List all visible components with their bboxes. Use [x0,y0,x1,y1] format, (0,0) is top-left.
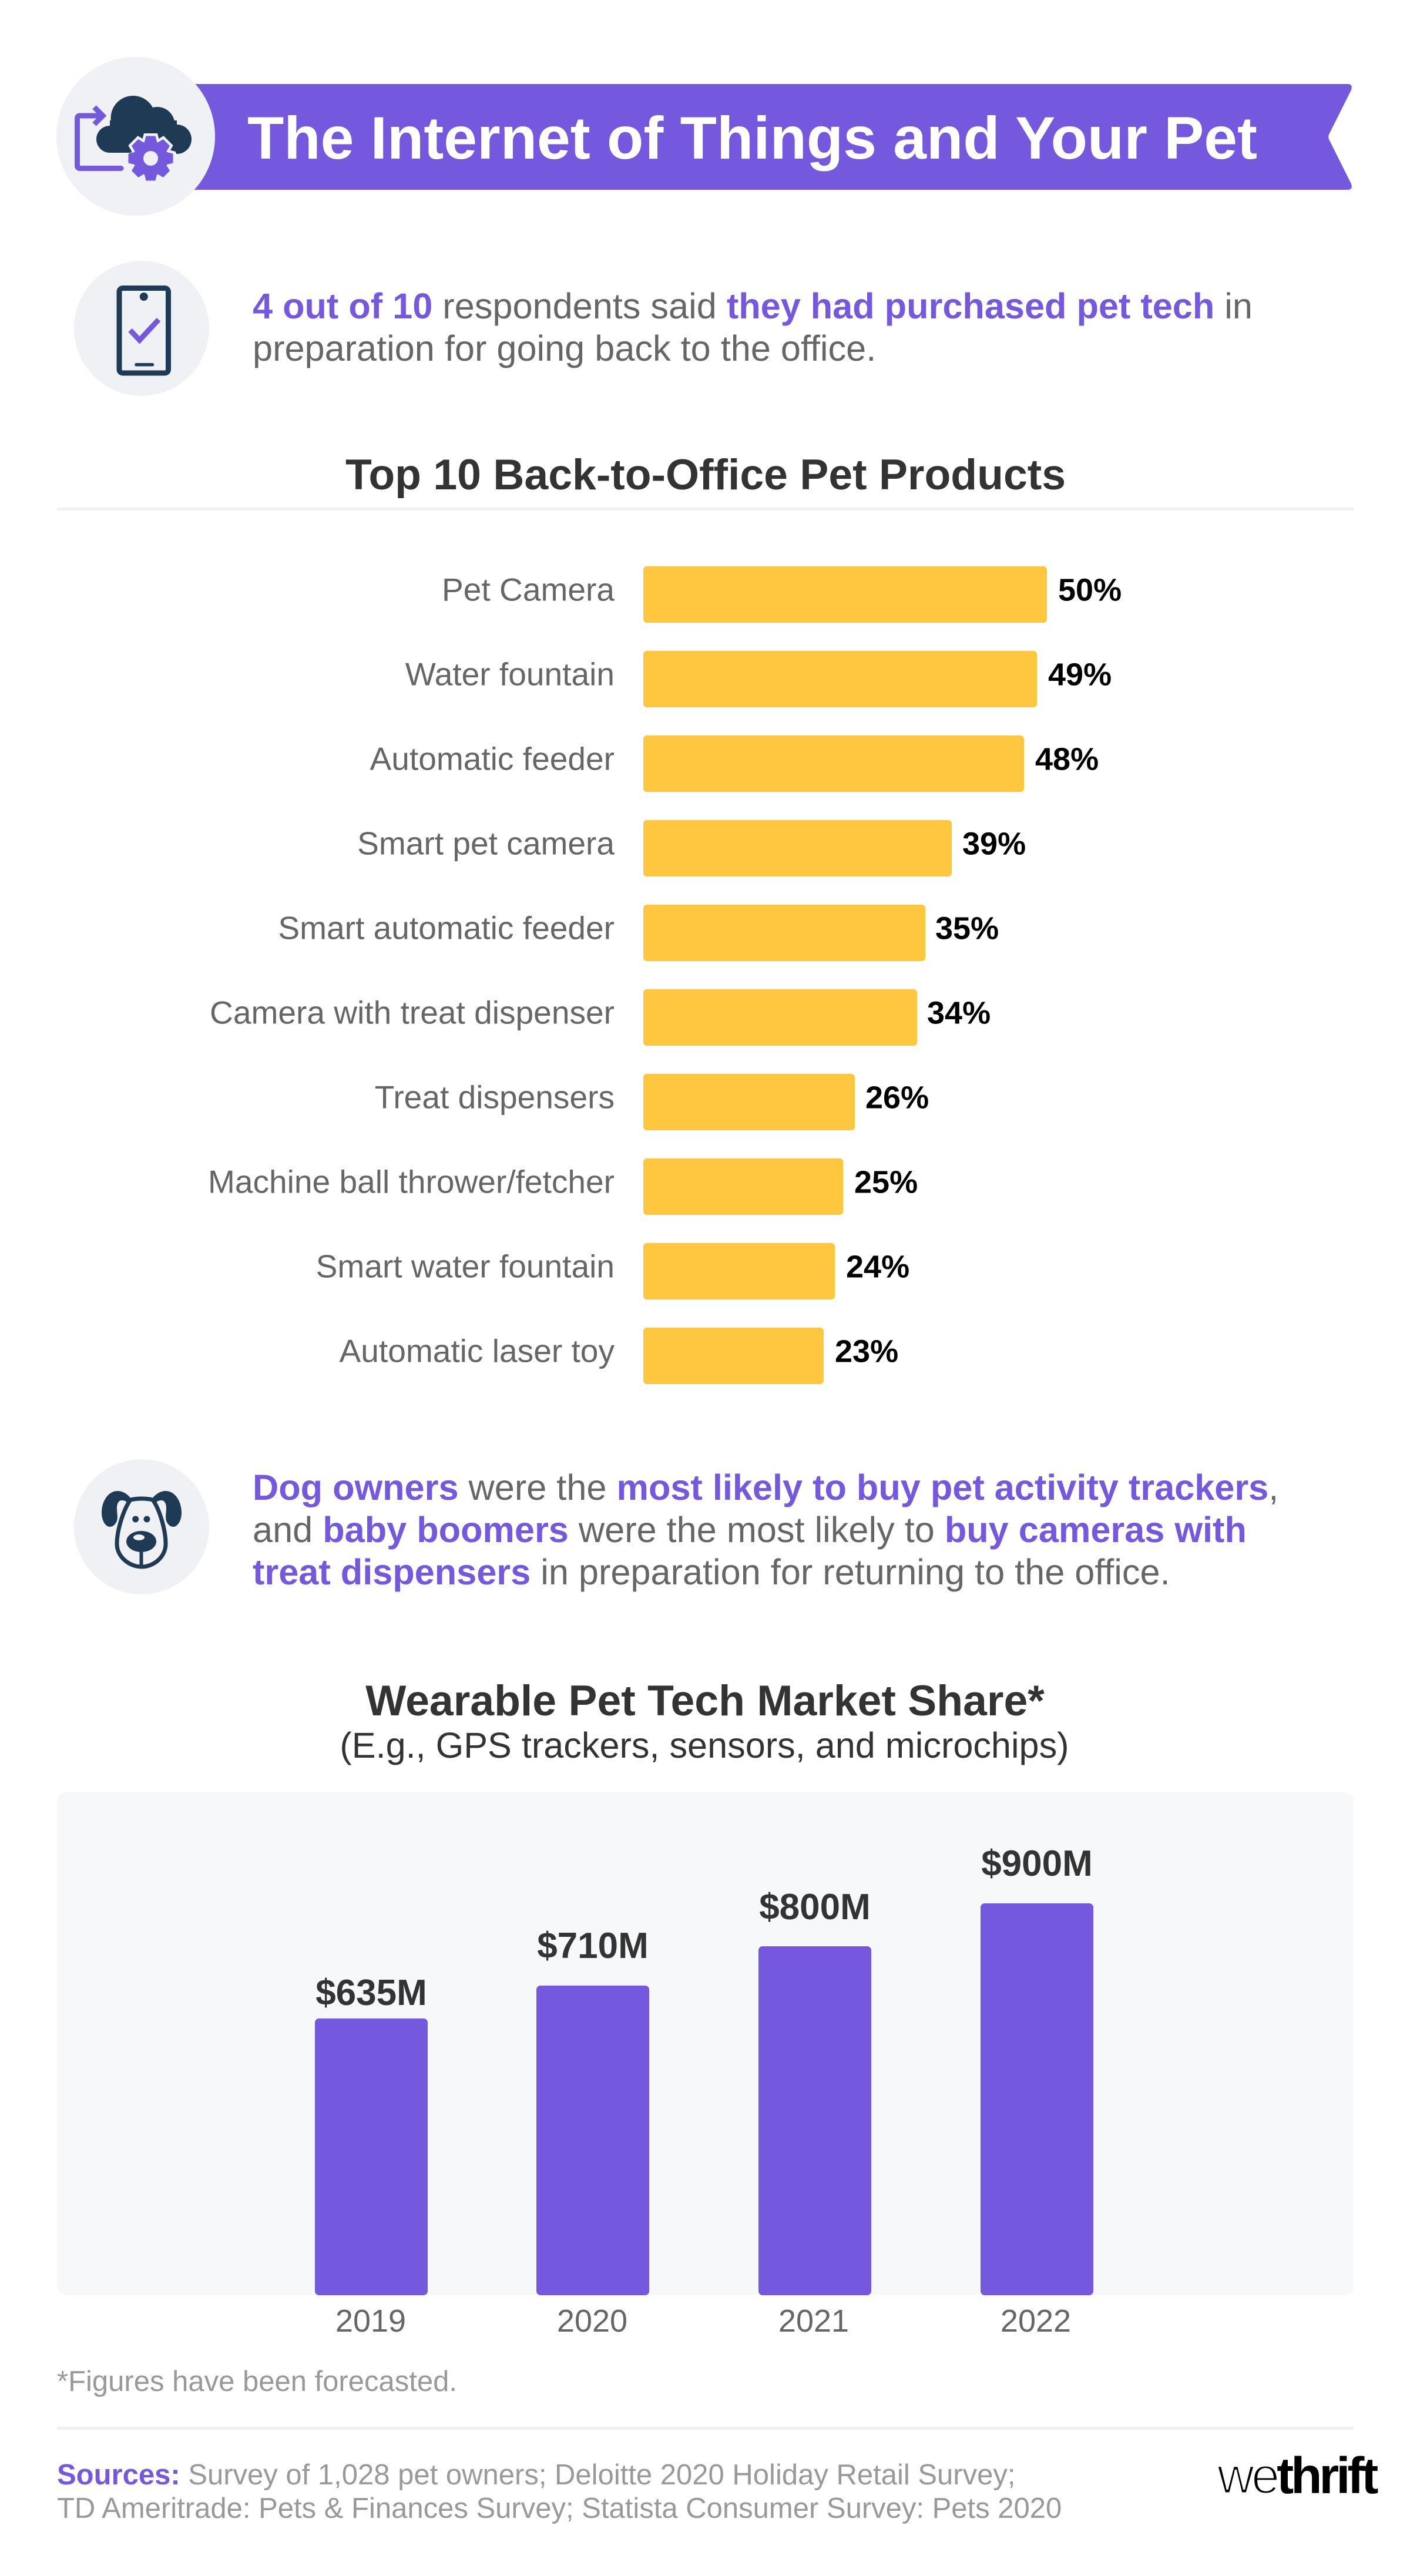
heading: wearable market share: (E.g., GPS trackers, sensors, and microchips) [340,1725,1069,1765]
bar row: Smart water fountain [316,1243,909,1299]
column: 2021: $800M [759,1887,871,1927]
bar row: Automatic laser toy: 23% [835,1334,898,1369]
icon: dog [74,1459,209,1594]
callout: purchased pet tech: 4 out of 10 respondents said they had purchased pet tech in [253,286,1253,326]
bar row: Machine ball thrower/fetcher [208,1158,918,1215]
column: 2019: 2019 [335,2303,406,2339]
column: 2022: $900M [981,1843,1093,1884]
callout: purchased pet tech: preparation for going back to the office. [253,328,876,368]
bar row: Treat dispensers: Treat dispensers [375,1079,615,1115]
callout: dog owners and baby boomers [253,1467,1278,1592]
bar row: Machine ball thrower/fetcher: Machine ball thrower/fetcher [208,1163,615,1200]
heading: top 10 products: Top 10 Back-to-Office Pet Products [345,451,1066,499]
bar row: Smart water fountain: Smart water fountain [316,1248,615,1284]
bar row: Automatic laser toy [340,1328,898,1384]
bar row: Automatic feeder: 48% [1035,741,1099,777]
title: The Internet of Things and Your Pet [247,105,1257,172]
column: 2020 [536,1926,649,2339]
bar row: Machine ball thrower/fetcher: 25% [854,1164,918,1200]
bar row: Water fountain [405,651,1112,707]
bar row: Smart pet camera: Smart pet camera [357,825,615,861]
bar row: Smart pet camera: 39% [962,826,1026,861]
heading: wearable market share [340,1677,1069,1765]
bar row: Automatic feeder: Automatic feeder [370,740,615,777]
callout: purchased pet tech [253,286,1253,368]
column: 2021 [758,1887,871,2339]
column: 2021: 2021 [778,2303,849,2339]
column: 2022 [981,1843,1093,2339]
bar row: Camera with treat dispenser: Camera with treat dispenser [210,994,615,1030]
bar row: Smart water fountain: 24% [846,1249,909,1284]
column: 2022: 2022 [1001,2303,1071,2339]
icon: phone with check [74,261,209,396]
bar row: Water fountain: Water fountain [405,656,615,692]
footnote: *Figures have been forecasted. [57,2366,457,2397]
icon: cloud with gear [56,57,215,216]
bar row: Camera with treat dispenser [210,989,991,1046]
panel: market share chart [57,1792,1354,2339]
logo: wethrift: wethrift [1217,2447,1378,2504]
callout: dog owners and baby boomers: and baby boomers were the most likely to buy cameras with [253,1510,1247,1550]
column: 2020: $710M [537,1926,649,1966]
bar row: Smart automatic feeder: 35% [935,911,999,946]
title banner [176,84,1352,190]
bar row: Treat dispensers [375,1074,929,1130]
callout: dog owners and baby boomers: Dog owners were the most likely to buy pet activity trackers, [253,1467,1278,1507]
bar row: Water fountain: 49% [1048,657,1112,692]
bar chart: top 10 products [208,566,1122,1384]
sources [57,2459,1062,2524]
column: 2019: $635M [315,1973,427,2013]
bar row: Smart pet camera [357,820,1026,876]
bar row: Pet Camera: 50% [1058,572,1122,607]
bar row: Pet Camera: Pet Camera [442,571,615,607]
bar row: Treat dispensers: 26% [865,1080,929,1115]
bar row: Camera with treat dispenser: 34% [927,995,991,1030]
bar row: Smart automatic feeder [278,905,999,961]
column: 2019 [315,1973,428,2339]
bar row: Pet Camera [442,566,1122,623]
bar row: Smart automatic feeder: Smart automatic feeder [278,909,615,946]
callout: dog owners and baby boomers: treat dispensers in preparation for returning to the office. [253,1552,1170,1592]
heading: wearable market share: Wearable Pet Tech Market Share* [365,1677,1045,1725]
sources: Sources: Survey of 1,028 pet owners; Deloitte 2020 Holiday Retail Survey; [57,2459,1015,2491]
bar row: Automatic laser toy: Automatic laser toy [340,1332,615,1369]
sources: TD Ameritrade: Pets & Finances Survey; Statista Consumer Survey: Pets 2020 [57,2493,1062,2524]
column: 2020: 2020 [557,2303,627,2339]
bar row: Automatic feeder [370,735,1099,792]
